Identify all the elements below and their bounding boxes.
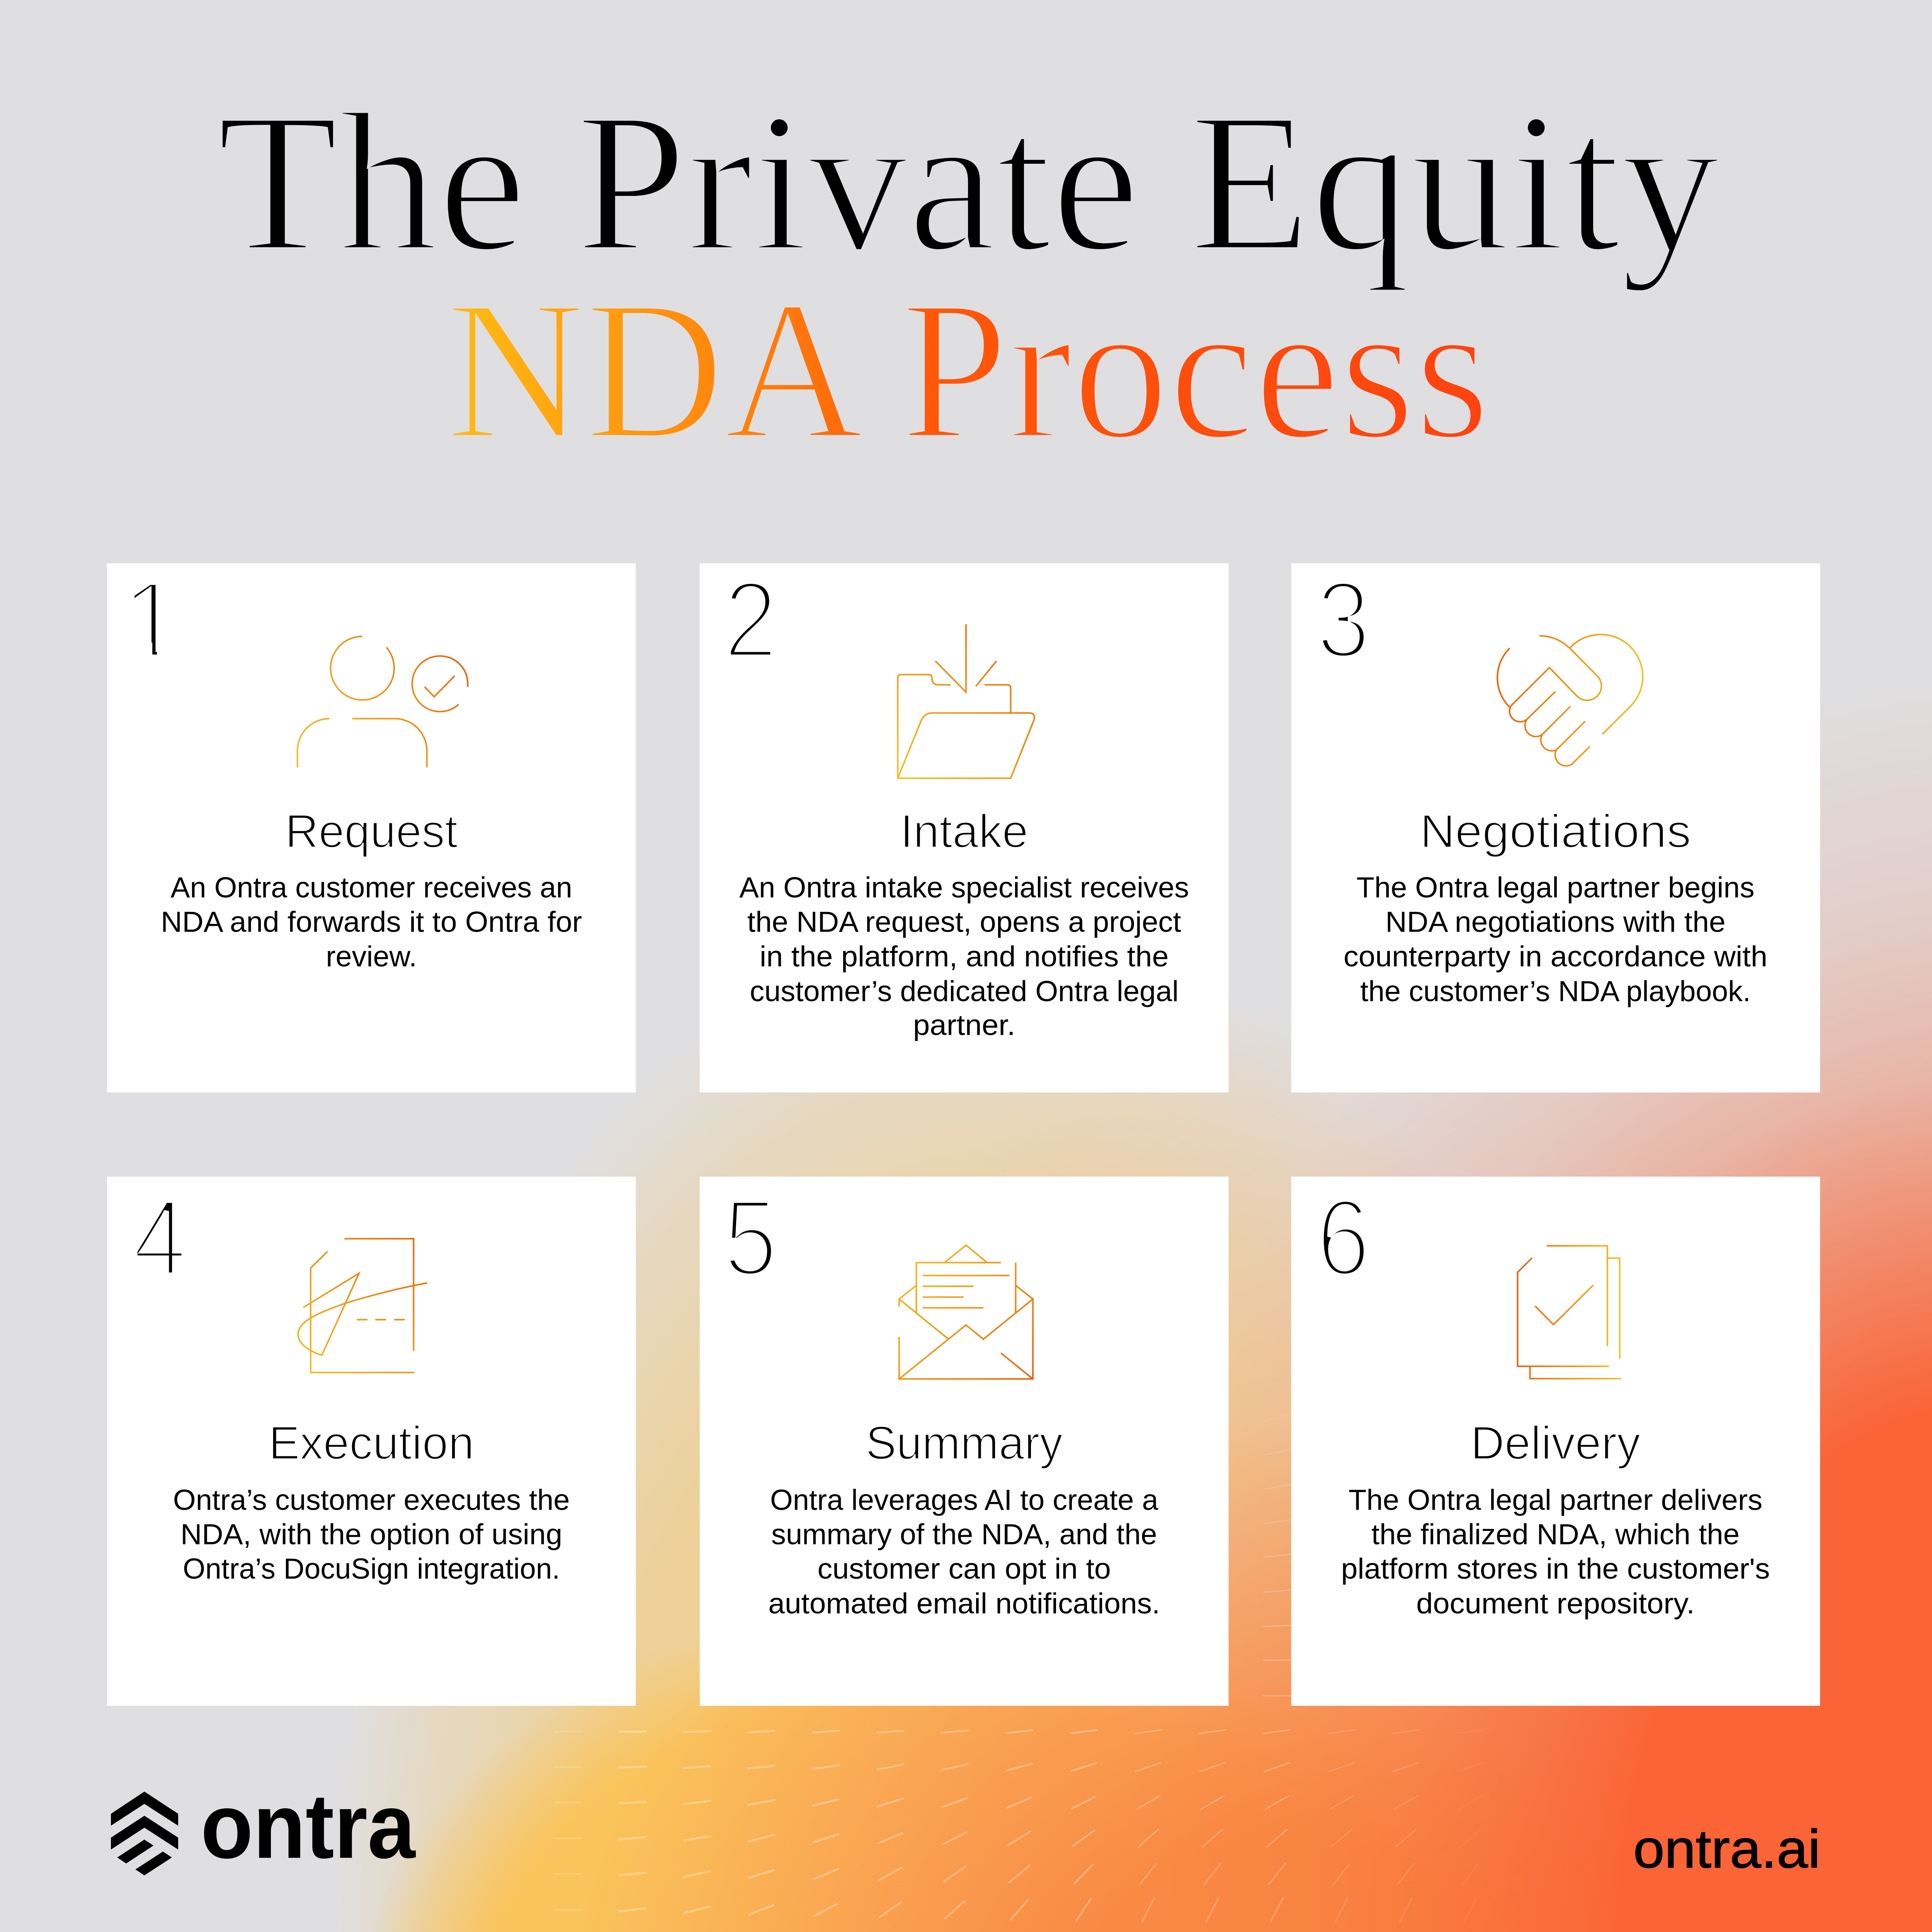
step number 1: 1 <box>121 558 182 680</box>
title line 1: The Private Equity <box>217 71 1720 293</box>
title <box>217 71 1720 480</box>
description: summary of the NDA, and the <box>771 1518 1157 1550</box>
panel: step 3 negotiations <box>1291 558 1820 1092</box>
description: document repository. <box>1416 1587 1695 1620</box>
description <box>1344 871 1767 1007</box>
website url: ontra.ai <box>1633 1819 1820 1879</box>
description: the finalized NDA, which the <box>1371 1518 1740 1550</box>
description: counterparty in accordance with <box>1344 940 1767 973</box>
panel: step 2 intake <box>700 558 1229 1092</box>
step number 2: 2 <box>724 558 777 680</box>
description: Ontra’s DocuSign integration. <box>183 1553 560 1585</box>
heading: Summary <box>866 1417 1063 1469</box>
icon: person with check <box>298 636 468 767</box>
description: NDA negotiations with the <box>1385 906 1726 938</box>
icon: folder with arrow <box>898 624 1034 778</box>
description: Ontra’s customer executes the <box>173 1483 570 1516</box>
description <box>161 871 582 973</box>
heading: Negotiations <box>1420 805 1691 857</box>
panel: step 6 delivery <box>1291 1176 1820 1706</box>
description <box>173 1483 570 1585</box>
icon: handshake heart <box>1497 634 1643 766</box>
heading: Delivery <box>1471 1417 1641 1469</box>
description: automated email notifications. <box>768 1587 1160 1620</box>
logo wordmark: ontra <box>201 1775 416 1878</box>
description: the customer’s NDA playbook. <box>1360 975 1751 1007</box>
icon: logo chevrons <box>111 1792 178 1875</box>
description <box>1341 1483 1770 1620</box>
panel: step 4 execution <box>107 1176 636 1706</box>
step number 4: 4 <box>133 1176 187 1298</box>
description: platform stores in the customer's <box>1341 1553 1770 1585</box>
icon: documents with check <box>1518 1246 1621 1379</box>
description: NDA and forwards it to Ontra for <box>161 906 582 938</box>
icon: signed document <box>298 1239 427 1372</box>
description <box>768 1483 1160 1620</box>
title line 2: NDA Process <box>446 259 1490 480</box>
description: An Ontra customer receives an <box>170 871 572 904</box>
panel: step 1 request <box>107 558 636 1092</box>
description <box>739 871 1189 1041</box>
logo: ontra <box>111 1775 416 1878</box>
description: The Ontra legal partner delivers <box>1349 1483 1762 1516</box>
description: partner. <box>913 1009 1015 1041</box>
description: Ontra leverages AI to create a <box>770 1483 1158 1516</box>
description: the NDA request, opens a project <box>747 906 1181 938</box>
description: NDA, with the option of using <box>180 1518 562 1550</box>
description: customer can opt in to <box>818 1553 1111 1585</box>
heading: Request <box>285 805 457 857</box>
description: in the platform, and notifies the <box>760 940 1169 973</box>
step number 3: 3 <box>1316 558 1370 680</box>
description: The Ontra legal partner begins <box>1356 871 1755 904</box>
heading: Intake <box>900 805 1028 857</box>
description: customer’s dedicated Ontra legal <box>750 975 1179 1007</box>
panel: step 5 summary <box>700 1176 1229 1706</box>
icon: open envelope <box>899 1245 1033 1379</box>
description: An Ontra intake specialist receives <box>739 871 1189 904</box>
step number 5: 5 <box>724 1176 777 1298</box>
description: review. <box>326 940 417 973</box>
heading: Execution <box>269 1417 474 1469</box>
step number 6: 6 <box>1316 1176 1370 1298</box>
